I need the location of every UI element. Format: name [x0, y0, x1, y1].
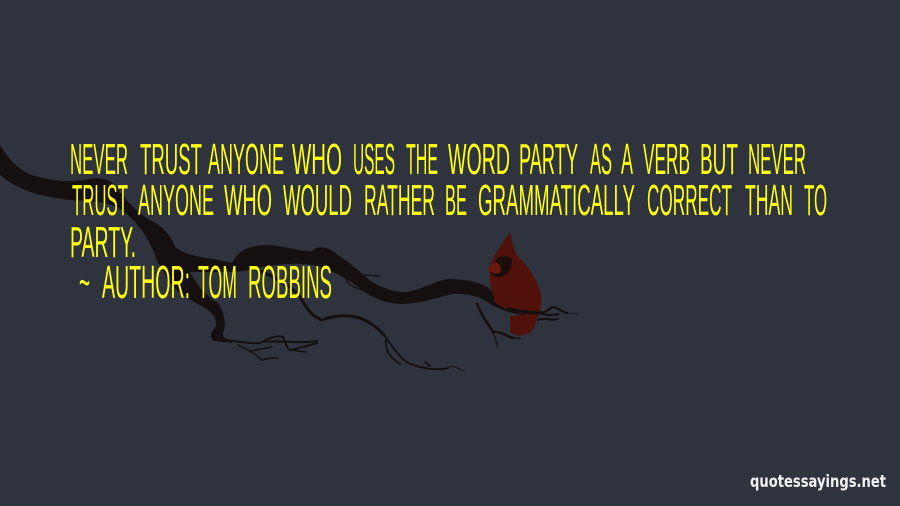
line 2: ANYONE — [138, 176, 214, 225]
body and crest — [488, 233, 541, 318]
face mask — [490, 256, 512, 277]
text: TO — [804, 176, 827, 225]
tree branch silhouette — [0, 145, 536, 371]
quote text: PARTY. — [70, 218, 136, 267]
line 2: BE — [445, 176, 467, 225]
line 2: THAN — [745, 176, 793, 225]
line 1: NEVER — [70, 135, 128, 184]
line 1: PARTY — [519, 135, 578, 184]
upper twigs — [322, 264, 380, 290]
cardinal bird — [488, 233, 541, 335]
quote text: ROBBINS — [248, 256, 332, 308]
lower left limb — [158, 262, 232, 343]
lower middle limb — [254, 268, 384, 335]
left limb twigs — [232, 336, 317, 350]
line 1: AS — [590, 135, 612, 184]
main branch — [0, 145, 536, 316]
line 2: TRUST — [72, 176, 128, 225]
line 1: THE — [406, 135, 438, 184]
line 2: GRAMMATICALLY — [478, 176, 635, 225]
line 2: CORRECT — [647, 176, 732, 225]
line 1: TRUST — [140, 135, 202, 184]
branch in front of bird and outer twigs — [508, 307, 578, 320]
quote text — [70, 135, 827, 308]
line 2: WHO — [224, 176, 272, 225]
author line: ~ — [79, 256, 90, 308]
line 1: WHO — [292, 135, 342, 184]
line 1 — [70, 135, 806, 184]
twigs below the bird — [477, 304, 513, 338]
line 2: WOULD — [283, 176, 352, 225]
line 1: ANYONE — [208, 135, 284, 184]
quote text: NEVER — [748, 135, 806, 184]
line 2: RATHER — [364, 176, 435, 225]
line 1: VERB — [643, 135, 690, 184]
tail — [510, 314, 537, 335]
line 1: WORD — [448, 135, 510, 184]
author line: TOM — [198, 256, 237, 308]
line 1: BUT — [700, 135, 738, 184]
line 2 — [72, 176, 827, 225]
line 1: A — [621, 135, 633, 184]
author line: AUTHOR: — [102, 256, 190, 308]
beak — [488, 262, 501, 273]
line 1: USES — [353, 135, 395, 184]
